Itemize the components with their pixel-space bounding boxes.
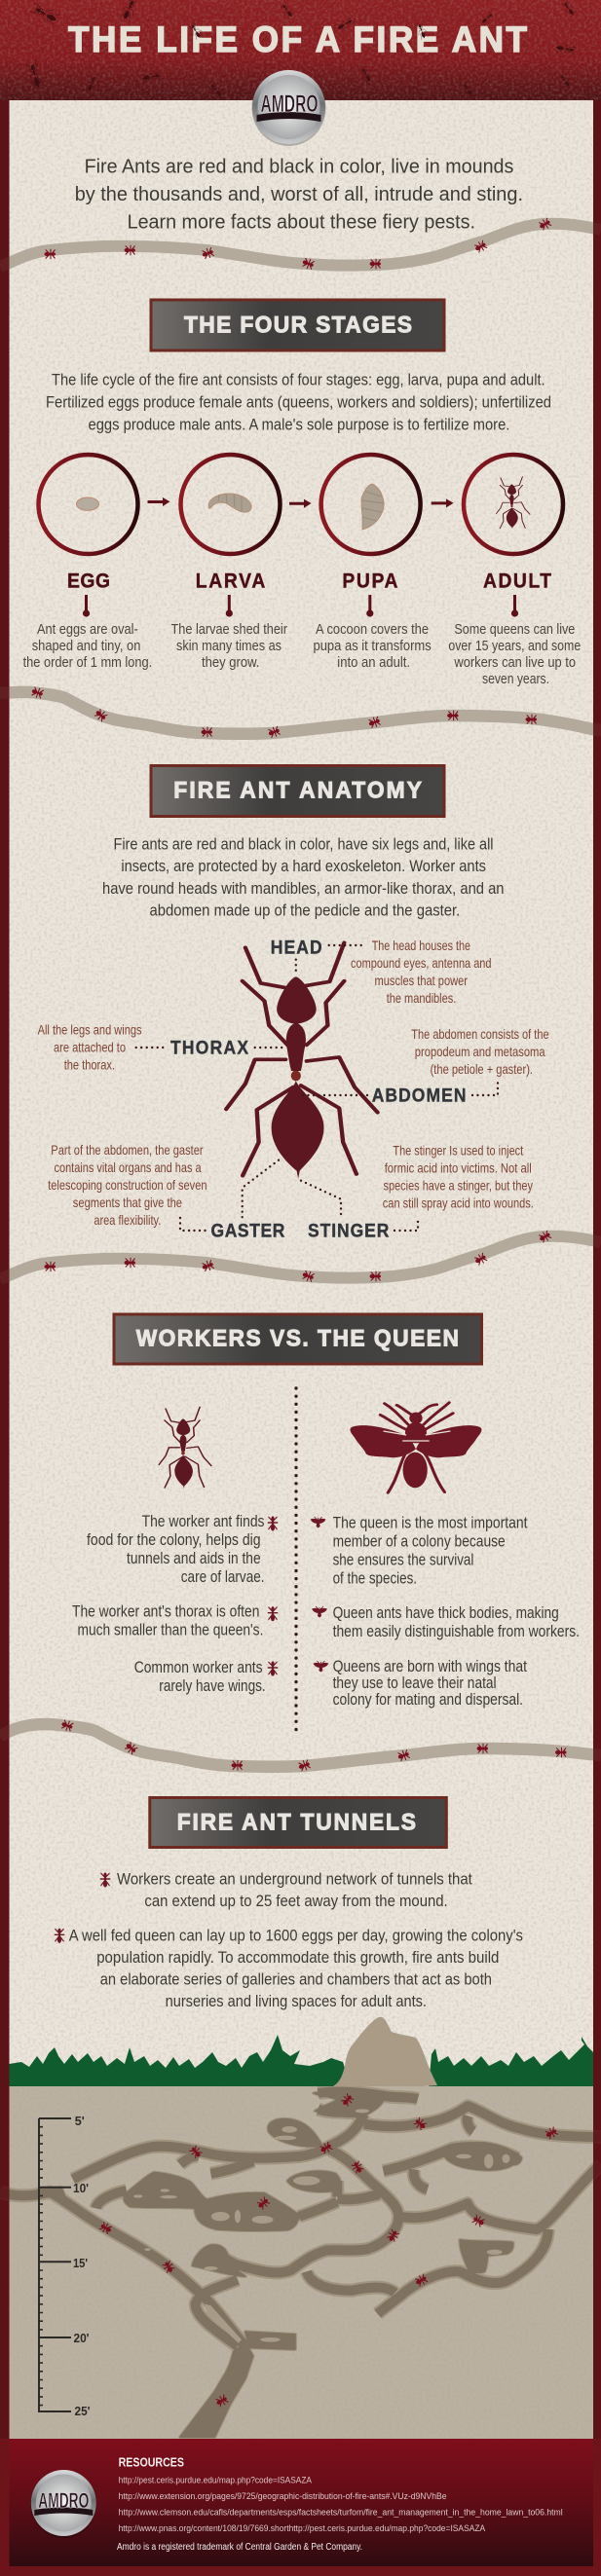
stage descriptions: shaped and tiny, on	[32, 639, 140, 654]
soil panel	[10, 2086, 593, 2439]
heading: fire ant tunnels	[150, 1797, 446, 1848]
thorax note	[38, 1022, 142, 1073]
queen facts: Queens are born with wings that	[333, 1658, 527, 1675]
head note: The head houses the	[372, 938, 470, 953]
stage labels	[67, 570, 552, 593]
tunnel text	[69, 1869, 523, 2010]
worker facts: The worker ant finds	[142, 1513, 265, 1530]
queen facts: The queen is the most important	[333, 1515, 528, 1532]
four stages intro text: eggs produce male ants. A male's sole purpose is to fertilize more.	[88, 415, 509, 434]
title: THE LIFE OF A FIRE ANT	[68, 18, 527, 59]
stage descriptions: skin many times as	[176, 639, 282, 654]
worker facts: Common worker ants	[134, 1659, 263, 1676]
arrow	[432, 498, 454, 507]
anatomy labels: HEAD	[271, 937, 322, 958]
intro text: Fire Ants are red and black in color, live in mounds	[85, 156, 513, 177]
queen facts: Queen ants have thick bodies, making	[333, 1604, 559, 1622]
anatomy intro text: have round heads with mandibles, an armor-like thorax, and an	[102, 879, 505, 898]
resources: RESOURCES	[119, 2455, 184, 2469]
heading: workers vs the queen: WORKERS VS. THE QUEEN	[136, 1325, 459, 1351]
stage descriptions	[23, 622, 581, 687]
gaster note: segments that give the	[73, 1195, 182, 1210]
central dotted divider	[294, 1388, 298, 1731]
worker facts: food for the colony, helps dig	[87, 1531, 261, 1549]
anatomy intro text	[102, 835, 505, 919]
gaster note: telescoping construction of seven	[48, 1177, 207, 1193]
tunnel text: an elaborate series of galleries and chambers that act as both	[100, 1970, 492, 1988]
heading: the four stages: THE FOUR STAGES	[184, 312, 412, 337]
abdomen note: The abdomen consists of the	[411, 1026, 549, 1042]
intro text: by the thousands and, worst of all, intrude and sting.	[75, 184, 523, 205]
tunnel text: population rapidly. To accommodate this growth, fire ants build	[96, 1948, 499, 1967]
worker facts: care of larvae.	[181, 1568, 265, 1586]
queen facts: she ensures the survival	[333, 1552, 473, 1569]
abdomen note	[411, 1026, 549, 1077]
tunnel text: nurseries and living spaces for adult ants.	[166, 1992, 427, 2010]
anatomy ant illustration	[226, 942, 378, 1179]
depth ruler: 5'	[75, 2114, 85, 2128]
gaster note: Part of the abdomen, the gaster	[51, 1142, 204, 1158]
resources: http://www.clemson.edu/cafls/departments/esps/factsheets/turfom/fire_ant_management_in_the_home_lawn_to06.html	[119, 2508, 563, 2518]
stage labels: EGG	[67, 570, 110, 593]
heading: the four stages	[151, 300, 444, 350]
anatomy intro text: abdomen made up of the pedicle and the gaster.	[150, 902, 460, 919]
stage pointers	[83, 595, 518, 617]
abdomen note: (the petiole + gaster).	[431, 1061, 533, 1077]
grass	[10, 2035, 593, 2086]
footer background	[0, 2439, 601, 2576]
stage descriptions: pupa as it transforms	[314, 639, 432, 654]
arrow	[289, 499, 312, 508]
stage descriptions: they grow.	[202, 655, 259, 671]
ant trail 3	[0, 1230, 601, 1283]
ant trail 4	[0, 1719, 601, 1772]
tunnel text: Workers create an underground network of tunnels that	[117, 1869, 472, 1889]
resources: http://pest.ceris.purdue.edu/map.php?code=ISASAZA	[119, 2475, 313, 2486]
stage descriptions: the order of 1 mm long.	[23, 655, 152, 671]
worker facts: tunnels and aids in the	[127, 1550, 261, 1567]
anatomy intro text: Fire ants are red and black in color, have six legs and, like all	[113, 835, 493, 853]
queen bullets	[311, 1517, 328, 1673]
worker facts	[72, 1513, 266, 1695]
stinger note: can still spray acid into wounds.	[383, 1196, 534, 1211]
stinger note	[383, 1143, 534, 1211]
depth ruler: 20'	[74, 2331, 90, 2345]
abdomen note: propodeum and metasoma	[415, 1044, 545, 1059]
stage descriptions: A cocoon covers the	[316, 622, 429, 638]
header background	[0, 0, 601, 107]
queen facts: colony for mating and dispersal.	[333, 1691, 523, 1709]
heading: fire ant tunnels: FIRE ANT TUNNELS	[177, 1809, 416, 1834]
worker facts: The worker ant's thorax is often	[72, 1602, 259, 1620]
footer logo: Amdro: AMDRO	[38, 2488, 89, 2513]
stage descriptions: Ant eggs are oval-	[37, 622, 138, 638]
gaster note	[48, 1142, 207, 1228]
anatomy labels	[170, 937, 466, 1241]
anatomy labels: STINGER	[308, 1220, 389, 1241]
anatomy leader dots	[136, 945, 498, 1231]
anatomy labels: GASTER	[210, 1220, 284, 1241]
tunnel text: A well fed queen can lay up to 1600 eggs per day, growing the colony's	[69, 1926, 523, 1945]
head note: muscles that power	[374, 973, 468, 988]
head note	[351, 938, 491, 1006]
stinger note: formic acid into victims. Not all	[385, 1160, 532, 1176]
intro text	[75, 156, 523, 234]
stage: pupa	[321, 455, 421, 554]
anatomy labels: ABDOMEN	[372, 1085, 466, 1106]
queen facts: member of a colony because	[333, 1532, 506, 1550]
stinger note: The stinger Is used to inject	[393, 1143, 523, 1159]
stinger note: species have a stinger, but they	[384, 1178, 533, 1194]
worker facts: much smaller than the queen's.	[78, 1622, 263, 1639]
tunnel network	[0, 2091, 601, 2437]
worker ant icon	[159, 1407, 211, 1489]
worker facts: rarely have wings.	[159, 1677, 266, 1695]
gaster note: area flexibility.	[94, 1212, 161, 1228]
four stages intro text	[46, 370, 551, 434]
stage labels: LARVA	[196, 570, 266, 593]
resources: Amdro is a registered trademark of Central Garden & Pet Company.	[117, 2542, 362, 2553]
stage descriptions: Some queens can live	[454, 622, 575, 638]
heading: fire ant anatomy	[151, 765, 444, 816]
stage descriptions: over 15 years, and some	[448, 639, 581, 654]
stage: adult	[464, 455, 563, 554]
stage descriptions: The larvae shed their	[171, 622, 287, 638]
stage labels: ADULT	[483, 570, 552, 593]
gaster note: contains vital organs and has a	[55, 1159, 202, 1175]
intro text: Learn more facts about these fiery pests.	[128, 212, 475, 234]
head note: the mandibles.	[387, 990, 456, 1006]
head note: compound eyes, antenna and	[351, 955, 491, 971]
ant trail 2	[0, 686, 601, 739]
queen facts	[333, 1515, 580, 1709]
thorax note: the thorax.	[64, 1057, 115, 1073]
ant mound	[333, 2017, 437, 2087]
logo: Amdro: AMDRO	[261, 91, 318, 118]
depth ruler	[39, 2114, 90, 2418]
depth ruler: 15'	[73, 2256, 88, 2270]
scattered header ants	[24, 0, 578, 99]
thorax note: All the legs and wings	[38, 1022, 142, 1038]
stage descriptions: workers can live up to	[454, 655, 576, 671]
resources: http://www.pnas.org/content/108/19/7669.shorthttp://pest.ceris.purdue.edu/map.php?code=ISASAZA	[119, 2523, 486, 2534]
anatomy intro text: insects, are protected by a hard exoskeleton. Worker ants	[121, 857, 486, 875]
ants crawling over the title	[187, 20, 430, 40]
arrow	[148, 497, 169, 506]
tunnel bullets	[55, 1872, 110, 1943]
anatomy labels: THORAX	[170, 1037, 249, 1058]
tunnel text: can extend up to 25 feet away from the mound.	[144, 1892, 448, 1910]
queen ant icon	[350, 1403, 481, 1492]
worker bullets	[268, 1516, 278, 1676]
queen facts: they use to leave their natal	[333, 1674, 497, 1692]
depth ruler: 10'	[73, 2181, 89, 2195]
stage: larva	[181, 455, 281, 554]
heading: workers vs the queen	[114, 1314, 481, 1364]
stage descriptions: seven years.	[482, 672, 549, 687]
stage labels: PUPA	[342, 570, 398, 593]
depth ruler: 25'	[74, 2404, 90, 2418]
logo: Amdro	[251, 70, 325, 146]
resources: http://www.extension.org/pages/9725/geographic-distribution-of-fire-ants#.VUz-d9NVhBe	[119, 2491, 446, 2502]
footer logo: Amdro	[30, 2470, 96, 2538]
resources	[117, 2455, 563, 2553]
ant trail 1	[0, 217, 601, 271]
thorax note: are attached to	[54, 1040, 126, 1055]
queen facts: of the species.	[333, 1569, 417, 1587]
stage descriptions: into an adult.	[337, 655, 410, 671]
tunnel ants	[98, 2093, 559, 2408]
heading: fire ant anatomy: FIRE ANT ANATOMY	[173, 777, 422, 803]
stage: egg	[39, 455, 138, 554]
